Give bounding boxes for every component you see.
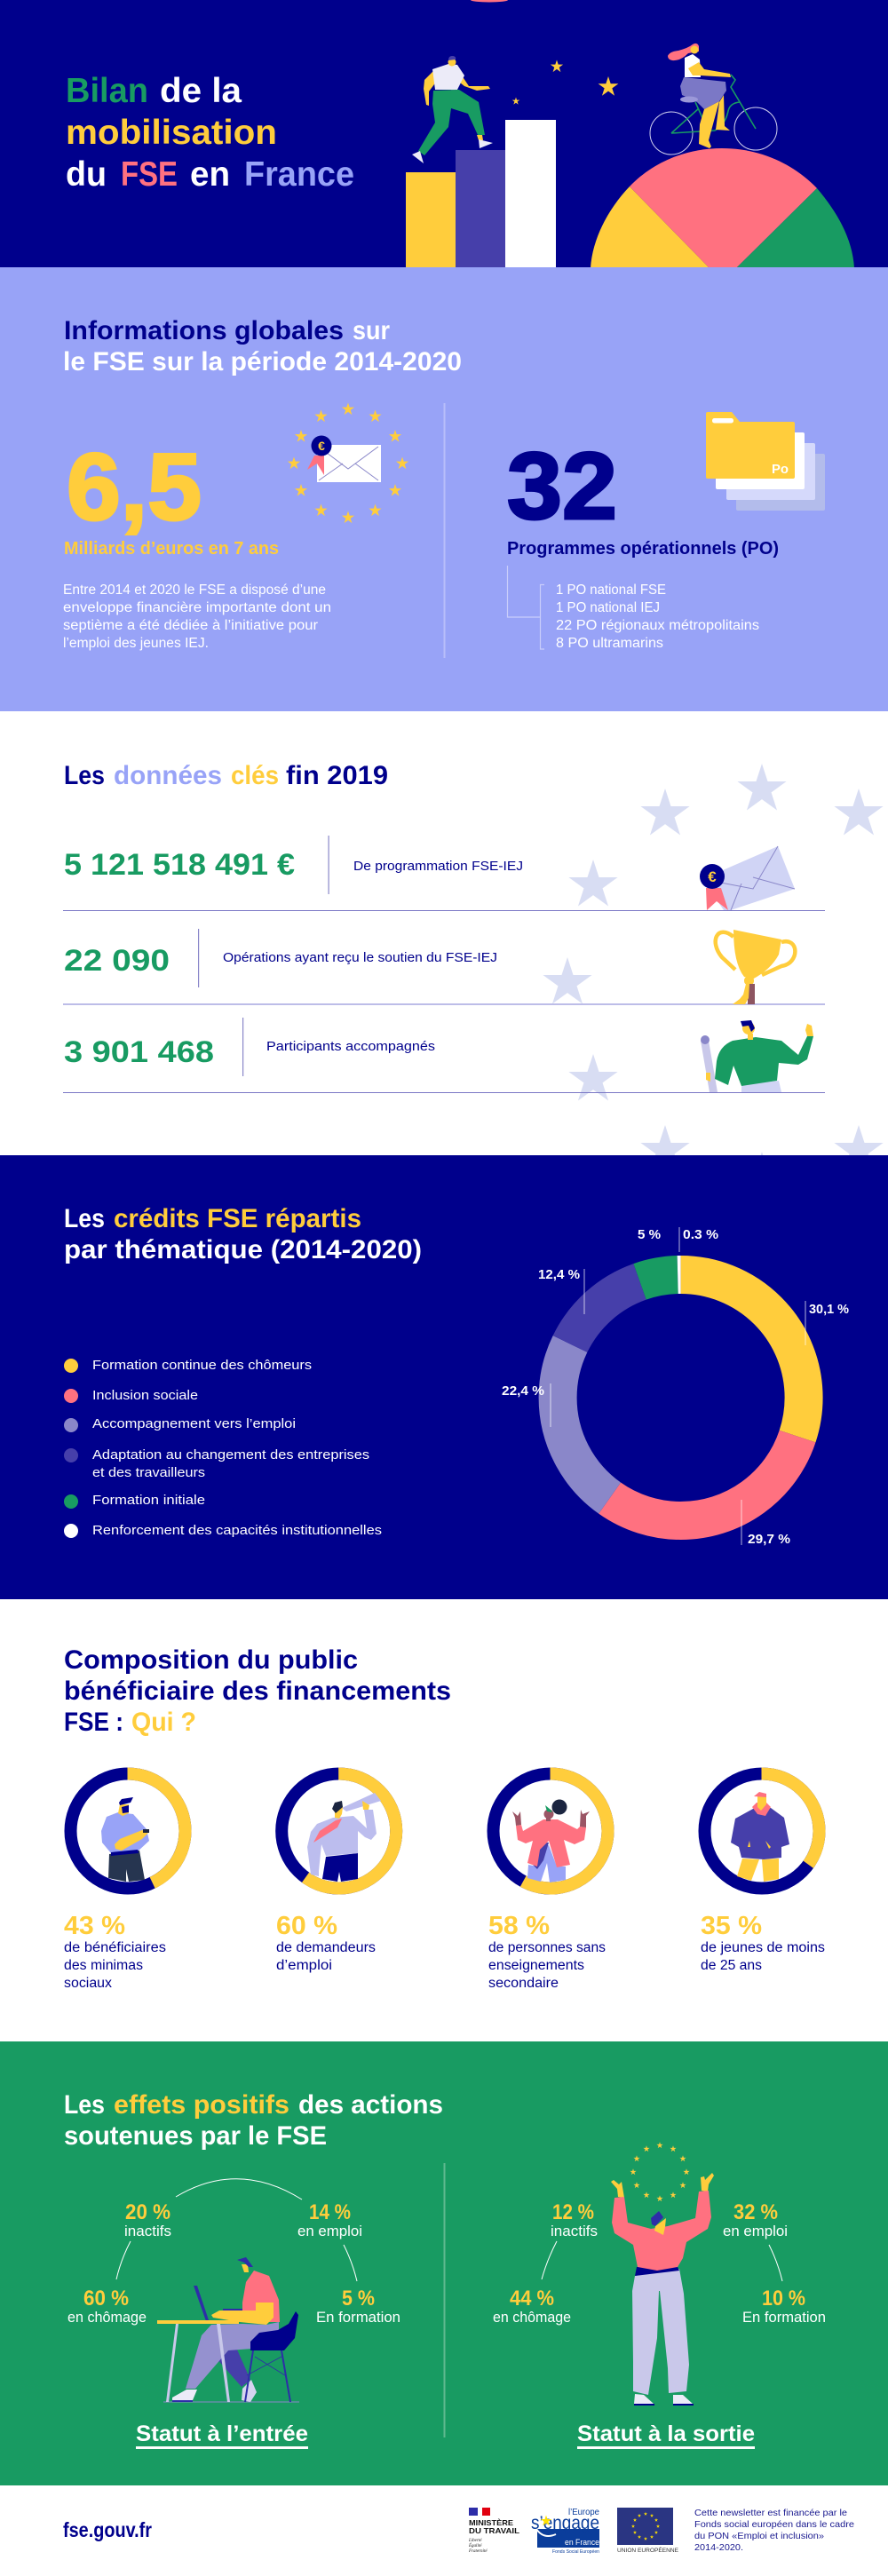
chart: statut à la sortie: 12 % xyxy=(552,2200,594,2224)
icon: man with staff xyxy=(701,1020,813,1092)
chart: statut à la sortie: en chômage xyxy=(493,2309,571,2326)
logo: l'Europe s'engage xyxy=(531,2508,599,2555)
chart: statut à la sortie: inactifs xyxy=(551,2223,598,2239)
chart: statut à la sortie xyxy=(493,2200,826,2326)
chart: statut à la sortie: 32 % xyxy=(733,2200,778,2224)
caption: statut sortie: Statut à la sortie xyxy=(577,2421,755,2446)
heading: Composition du public xyxy=(64,1645,358,1675)
icon: stars xyxy=(512,60,618,105)
chart: statut à l'entrée: 20 % xyxy=(125,2200,170,2224)
logo: ministère du travail: DU TRAVAIL xyxy=(469,2526,519,2535)
chart: statut à l'entrée: en chômage xyxy=(67,2309,147,2326)
chart: statut à la sortie: en emploi xyxy=(723,2223,788,2239)
logo: ministère du travail: Fraternité xyxy=(468,2549,488,2554)
chart: statut à l'entrée: en emploi xyxy=(297,2223,362,2239)
legend: Inclusion sociale xyxy=(92,1388,198,1403)
donut chart xyxy=(502,1227,849,1547)
row: programmation: De programmation FSE-IEJ xyxy=(353,859,523,874)
icon: EU stars and envelope xyxy=(288,403,408,523)
panel: crédits FSE xyxy=(0,1155,888,1599)
row: participants: Participants accompagnés xyxy=(266,1039,435,1054)
text block: description xyxy=(63,583,331,651)
icon: EU stars and envelope: € xyxy=(318,439,325,453)
icon: stacked folders xyxy=(706,412,825,511)
text block: funding note xyxy=(694,2508,854,2553)
icon: envelope with medal xyxy=(700,846,795,910)
card: 35 % xyxy=(701,1774,825,1973)
row: opérations xyxy=(63,929,825,1005)
caption: statut entrée: Statut à l’entrée xyxy=(136,2421,308,2446)
row: opérations: 22 090 xyxy=(64,944,170,978)
heading xyxy=(64,1204,422,1264)
card: 58 % xyxy=(488,1774,607,1991)
logo: union européenne: UNION EUROPÉENNE xyxy=(617,2548,678,2554)
icon: trophy xyxy=(716,930,795,1004)
legend xyxy=(64,1358,382,1538)
icon: man climbing the bars xyxy=(412,56,493,163)
panel: composition du public xyxy=(0,1599,888,2041)
heading: Les xyxy=(64,2090,105,2120)
card: 35 %: de jeunes de moins xyxy=(701,1940,825,1955)
title: de la xyxy=(160,72,242,110)
icon: person with star ring xyxy=(611,2142,714,2406)
chart: statut à l'entrée: En formation xyxy=(316,2309,400,2326)
icon: person at a desk xyxy=(157,2257,299,2403)
card: 43 % xyxy=(64,1774,185,1991)
card: 58 %: 58 % xyxy=(488,1912,550,1940)
chart: statut à l'entrée xyxy=(67,2179,400,2326)
heading: des actions xyxy=(298,2090,443,2120)
donut chart: 0.3 % xyxy=(683,1227,718,1242)
heading: crédits FSE répartis xyxy=(114,1204,361,1233)
legend: Renforcement des capacités institutionnelles xyxy=(92,1523,382,1538)
row: opérations: Opérations ayant reçu le soutien du FSE-IEJ xyxy=(223,950,497,965)
icon: stacked folders: Po xyxy=(772,462,789,477)
text block: funding note: Cette newsletter est financée par le xyxy=(694,2508,847,2518)
panel: effets positifs xyxy=(0,2041,888,2485)
legend: et des travailleurs xyxy=(92,1465,205,1480)
legend: Accompagnement vers l’emploi xyxy=(92,1416,296,1431)
heading: FSE : xyxy=(64,1708,123,1737)
card: 58 %: enseignements xyxy=(488,1958,584,1973)
card: 58 %: secondaire xyxy=(488,1976,559,1991)
pie hill xyxy=(591,148,854,268)
logo: l'Europe s'engage: Fonds Social Européen xyxy=(552,2549,599,2555)
big number 6,5: 6,5 xyxy=(67,433,202,540)
list of programmes: 22 PO régionaux métropolitains xyxy=(556,618,759,633)
heading: sur xyxy=(353,316,390,345)
donut chart: 5 % xyxy=(638,1227,661,1242)
title xyxy=(66,72,354,194)
list of programmes: 1 PO national FSE xyxy=(556,583,666,598)
chart: statut à l'entrée: inactifs xyxy=(124,2223,171,2239)
card: 60 %: 60 % xyxy=(276,1912,337,1940)
row: participants xyxy=(63,1018,825,1093)
donut chart: 29,7 % xyxy=(748,1532,790,1547)
donut chart: 22,4 % xyxy=(502,1383,544,1399)
title: Bilan xyxy=(66,72,148,110)
donut chart: 12,4 % xyxy=(538,1267,580,1282)
heading: Les xyxy=(64,761,105,790)
heading xyxy=(63,316,462,376)
heading: par thématique (2014-2020) xyxy=(64,1235,422,1264)
card: 43 %: de bénéficiaires xyxy=(64,1940,166,1955)
panel: footer xyxy=(0,2485,888,2576)
chart: statut à l'entrée: 60 % xyxy=(83,2287,129,2310)
heading: Informations globales xyxy=(64,316,344,345)
chart: statut à la sortie: 10 % xyxy=(762,2287,805,2310)
heading xyxy=(64,1645,451,1737)
card: 43 %: des minimas xyxy=(64,1958,143,1973)
heading: Qui ? xyxy=(131,1708,196,1737)
logo: ministère du travail xyxy=(468,2508,519,2554)
logo: union européenne xyxy=(617,2508,678,2554)
donut chart: 30,1 % xyxy=(809,1302,849,1317)
text block: funding note: Fonds social européen dans le cadre xyxy=(694,2519,854,2530)
title: France xyxy=(244,155,354,194)
card: 35 %: 35 % xyxy=(701,1912,762,1940)
chart: statut à la sortie: 44 % xyxy=(510,2287,554,2310)
text block: description: enveloppe financière importante dont un xyxy=(63,600,331,615)
row: programmation xyxy=(63,836,825,911)
list of programmes: 1 PO national IEJ xyxy=(556,600,660,615)
logo: ministère du travail: Liberté xyxy=(468,2539,482,2543)
row: participants: 3 901 468 xyxy=(64,1035,214,1069)
row: programmation: 5 121 518 491 € xyxy=(64,848,295,882)
title: du xyxy=(66,155,107,194)
text block: funding note: du PON «Emploi et inclusion» xyxy=(694,2531,824,2541)
text block: description: septième a été dédiée à l’initiative pour xyxy=(63,618,318,633)
text block: description: Entre 2014 et 2020 le FSE a disposé d’une xyxy=(63,583,326,598)
heading: données xyxy=(114,761,222,790)
card: 35 %: de 25 ans xyxy=(701,1958,762,1973)
heading: soutenues par le FSE xyxy=(64,2121,327,2151)
caption: programmes: Programmes opérationnels (PO) xyxy=(507,539,779,559)
caption: milliards: Milliards d’euros en 7 ans xyxy=(64,539,279,559)
card: 60 %: d’emploi xyxy=(276,1958,332,1973)
title: mobilisation xyxy=(66,114,277,152)
heading: fin 2019 xyxy=(286,761,388,790)
logo: l'Europe s'engage: s’engage xyxy=(531,2513,599,2533)
legend: Formation initiale xyxy=(92,1493,205,1508)
card: 60 % xyxy=(276,1774,396,1973)
heading xyxy=(64,2090,443,2151)
list of programmes xyxy=(556,583,759,651)
logo: l'Europe s'engage: en France xyxy=(565,2538,599,2547)
heading xyxy=(64,761,388,790)
logo: ministère du travail: Égalité xyxy=(468,2543,482,2548)
icon: envelope with medal: € xyxy=(708,868,717,885)
heading: Les xyxy=(64,1204,105,1233)
list of programmes: 8 PO ultramarins xyxy=(556,636,663,651)
card: 43 %: sociaux xyxy=(64,1976,112,1991)
text block: funding note: 2014-2020. xyxy=(694,2542,743,2553)
website link: fse.gouv.fr xyxy=(63,2518,152,2541)
big number 32: 32 xyxy=(507,432,617,539)
icon: woman on bicycle xyxy=(650,44,777,155)
chart: statut à l'entrée: 14 % xyxy=(309,2200,351,2224)
bar chart illustration xyxy=(406,120,556,268)
heading: clés xyxy=(231,761,279,790)
heading: effets positifs xyxy=(114,2090,289,2120)
panel: données clés xyxy=(0,711,888,1198)
legend: Adaptation au changement des entreprises xyxy=(92,1447,369,1462)
legend: Formation continue des chômeurs xyxy=(92,1358,312,1373)
logo: l'Europe s'engage: l’Europe xyxy=(568,2508,599,2517)
logo: ministère du travail: MINISTÈRE xyxy=(469,2518,513,2527)
card: 43 %: 43 % xyxy=(64,1912,125,1940)
title: en xyxy=(190,155,230,194)
chart: statut à la sortie: En formation xyxy=(742,2309,826,2326)
heading: bénéficiaire des financements xyxy=(64,1676,451,1706)
card: 60 %: de demandeurs xyxy=(276,1940,376,1955)
card: 58 %: de personnes sans xyxy=(488,1940,606,1955)
title: FSE xyxy=(121,155,178,194)
chart: statut à l'entrée: 5 % xyxy=(342,2287,375,2310)
heading: le FSE sur la période 2014-2020 xyxy=(63,347,462,376)
panel: header xyxy=(0,0,888,268)
text block: description: l’emploi des jeunes IEJ. xyxy=(63,636,209,651)
bracket connector xyxy=(508,566,544,649)
panel: informations globales xyxy=(0,267,888,711)
